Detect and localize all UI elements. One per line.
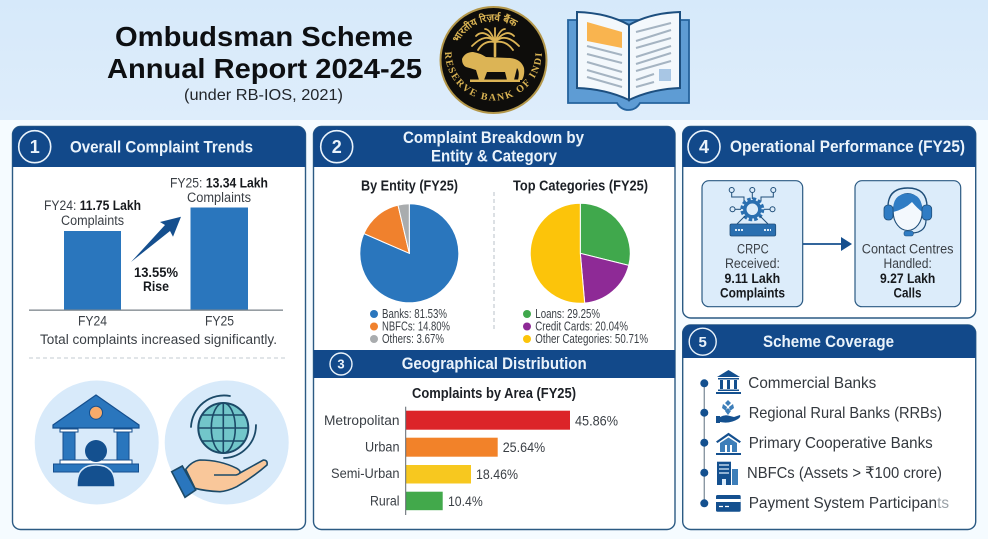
bar chart: complaints FY24 vs FY25: FY24 — [78, 314, 107, 328]
bar chart: complaints by area: 10.4% — [448, 494, 483, 509]
card: CRPC received: Complaints — [720, 286, 785, 300]
legend: entity: Banks: 81.53% — [382, 307, 447, 321]
panel: overall complaint trends — [12, 126, 306, 530]
card: contact centres handled — [855, 181, 961, 307]
item: commercial banks: Commercial Banks — [748, 375, 876, 392]
icon: RBI seal — [440, 6, 548, 114]
bar chart: complaints by area: 18.46% — [476, 467, 518, 482]
header band — [0, 0, 988, 120]
bar chart: complaints by area: 25.64% — [503, 440, 545, 455]
arrow: rise — [131, 217, 181, 262]
card: CRPC received: Received: — [725, 256, 780, 271]
bar chart: complaints FY24 vs FY25: Complaints — [187, 190, 251, 205]
panel 2 header: 2 — [332, 137, 342, 157]
bar chart: complaints by area: Urban — [365, 440, 400, 455]
item: payment system participants: Payment System Participants — [749, 495, 949, 512]
icon: tiger — [462, 52, 524, 80]
icon: bank with customer — [35, 380, 159, 504]
panel 3 header — [314, 350, 675, 378]
item: regional rural banks: Regional Rural Banks (RRBs) — [749, 405, 942, 422]
pie chart: by entity — [360, 178, 459, 346]
pie chart: top categories — [513, 178, 648, 346]
icon: commercial bank — [716, 370, 741, 394]
legend: categories — [523, 307, 648, 346]
title: (under RB-IOS, 2021) — [184, 87, 343, 104]
bar chart: complaints by area — [324, 386, 618, 515]
card: contact centres handled: Contact Centres — [862, 241, 954, 256]
icon: hand with plant — [716, 400, 740, 423]
panel 2 header: Entity & Category — [431, 148, 558, 166]
icon: palm tree — [472, 28, 519, 56]
panel 4 header — [683, 126, 976, 167]
panel 1 header: 1 — [30, 137, 40, 157]
card: CRPC received: 9.11 Lakh — [724, 271, 780, 286]
text: summary: Total complaints increased significantly. — [40, 332, 277, 347]
panel 4 header: 4 — [699, 137, 709, 157]
legend: entity: Others: 3.67% — [382, 332, 444, 346]
panel 1 header — [12, 126, 306, 167]
bar chart: complaints by area: Rural — [370, 494, 400, 509]
panel 4 header: Operational Performance (FY25) — [730, 138, 965, 156]
bar chart: complaints by area: Metropolitan — [324, 413, 400, 428]
card: CRPC received — [702, 181, 803, 307]
bar chart: complaints FY24 vs FY25 — [29, 176, 283, 328]
card: contact centres handled: Calls — [894, 286, 922, 300]
panel: complaint breakdown and geography — [314, 126, 675, 530]
title — [107, 21, 422, 104]
timeline — [700, 379, 708, 507]
panel 2 header: Complaint Breakdown by — [403, 129, 585, 147]
callout: 13.55% rise: Rise — [143, 279, 169, 294]
title: Annual Report 2024-25 — [107, 53, 422, 84]
bar chart: complaints FY24 vs FY25: Complaints — [61, 213, 124, 228]
icon: office buildings — [717, 462, 738, 485]
bar chart: complaints FY24 vs FY25: FY25: 13.34 Lakh — [170, 176, 268, 190]
card: contact centres handled: Handled: — [884, 256, 932, 271]
legend: categories: Other Categories: 50.71% — [535, 332, 648, 346]
panel 5 header: 5 — [699, 334, 707, 351]
item: NBFCs: NBFCs (Assets > ₹100 crore) — [747, 465, 942, 482]
card: CRPC received: CRPC — [737, 241, 769, 256]
callout: 13.55% rise — [134, 265, 178, 294]
card: contact centres handled: 9.27 Lakh — [880, 271, 935, 286]
icon: payment card — [716, 495, 741, 512]
title: Ombudsman Scheme — [115, 21, 413, 52]
pie chart: by entity: By Entity (FY25) — [361, 178, 458, 194]
icon: gear and server — [729, 188, 776, 236]
icon: RBI seal: भारतीय रिज़र्व बैंक — [452, 12, 518, 40]
item: primary cooperative banks: Primary Cooperative Banks — [749, 435, 933, 452]
panel 3 header: Geographical Distribution — [402, 355, 587, 373]
bar chart: complaints by area: Semi-Urban — [331, 466, 400, 481]
legend: entity: NBFCs: 14.80% — [382, 320, 450, 334]
panel: scheme coverage — [683, 325, 976, 530]
bar chart: complaints by area: Complaints by Area (FY25) — [412, 386, 576, 402]
legend: categories: Credit Cards: 20.04% — [535, 320, 628, 334]
icon: open book — [568, 12, 689, 110]
icon: globe in hand — [165, 380, 289, 504]
legend: categories: Loans: 29.25% — [535, 307, 600, 321]
bar chart: complaints by area: 45.86% — [575, 414, 618, 428]
panel 1 header: Overall Complaint Trends — [70, 138, 253, 156]
callout: 13.55% rise: 13.55% — [134, 265, 178, 280]
panel 2 header — [314, 126, 675, 167]
arrow: CRPC to contact centres — [803, 237, 852, 251]
bar chart: complaints FY24 vs FY25: FY25 — [205, 314, 234, 328]
panel 5 header — [683, 325, 976, 358]
pie chart: top categories: Top Categories (FY25) — [513, 178, 648, 194]
legend: entity — [370, 307, 450, 346]
bar chart: complaints FY24 vs FY25: FY24: 11.75 Lakh — [44, 198, 141, 213]
icon: headset agent — [884, 188, 932, 236]
panel: operational performance — [683, 126, 976, 318]
panel 5 header: Scheme Coverage — [763, 333, 894, 351]
icon: cooperative bank house — [716, 433, 741, 455]
panel 3 header: 3 — [337, 356, 345, 372]
